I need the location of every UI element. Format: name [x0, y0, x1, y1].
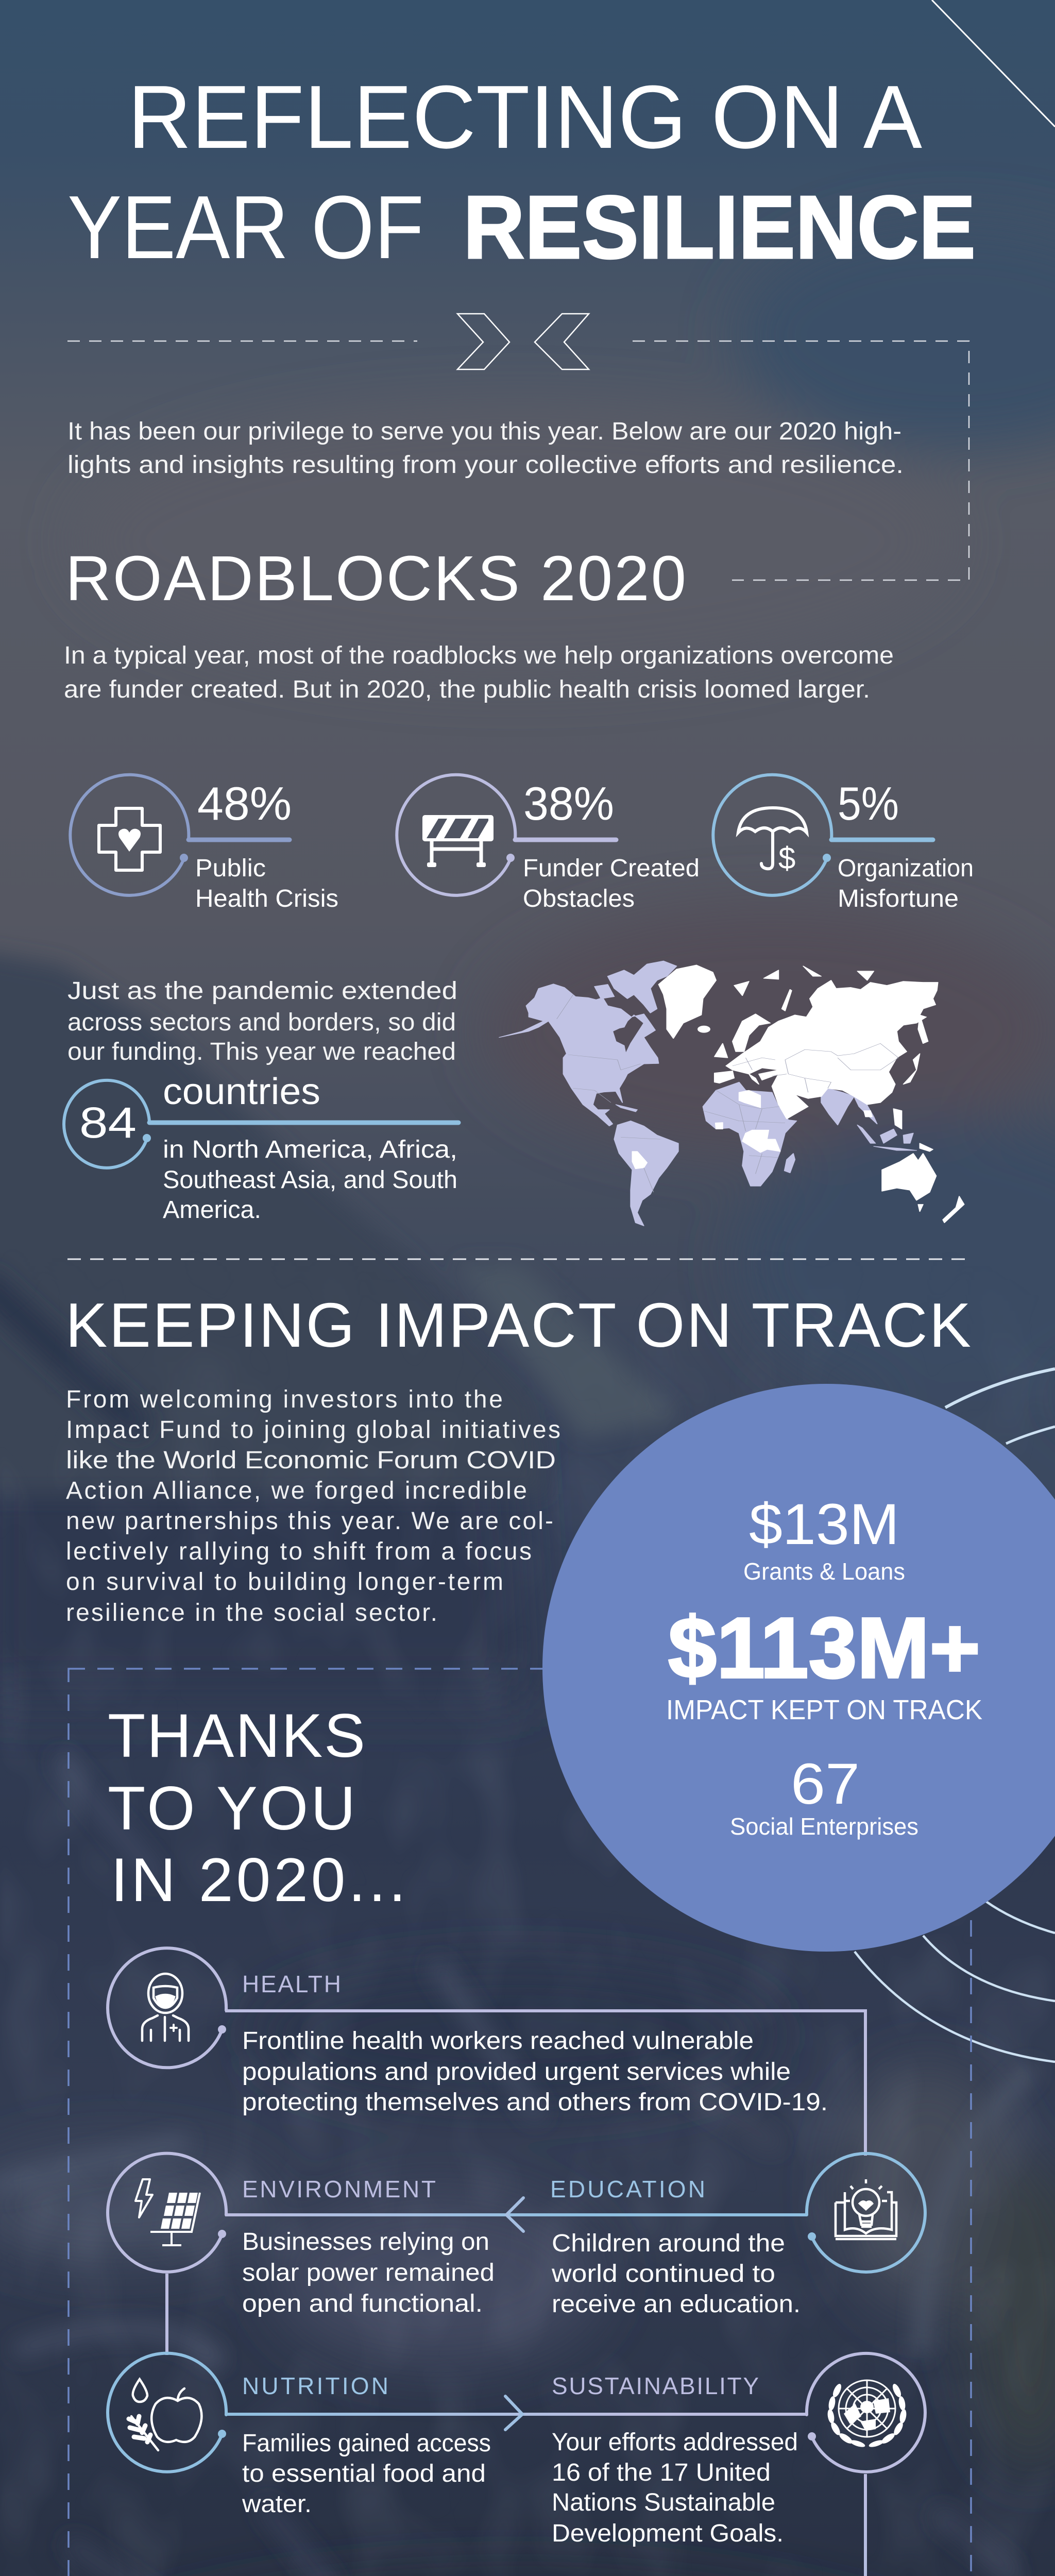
item: health: protecting themselves and others from COVID-19.	[242, 2089, 828, 2116]
stat: 38% funder created obstacles	[397, 775, 700, 912]
impact text: From welcoming investors into the	[66, 1386, 503, 1413]
arrow: nutrition to sustainability	[505, 2396, 522, 2430]
icon: masked health worker	[142, 1974, 189, 2041]
world map	[499, 961, 964, 1226]
item: environment: Businesses relying on	[242, 2228, 489, 2256]
item: health: populations and provided urgent services while	[242, 2058, 791, 2086]
icon: umbrella with dollar: $	[778, 841, 795, 875]
item: nutrition: NUTRITION	[242, 2372, 388, 2399]
ring and rule	[397, 775, 616, 895]
icon: book and lightbulb	[836, 2179, 896, 2239]
ring	[108, 2154, 226, 2272]
ring	[807, 2154, 925, 2272]
roadblocks intro text: In a typical year, most of the roadblocks we help organizations overcome	[64, 642, 894, 669]
title: REFLECTING ON A	[128, 66, 922, 167]
item: sustainability: Nations Sustainable	[552, 2489, 775, 2516]
stat: 84 countries: in North America, Africa,	[163, 1136, 457, 1163]
item: health	[108, 1948, 828, 2116]
ring	[807, 2353, 925, 2472]
roadblocks intro text	[64, 642, 894, 703]
heading: thanks to you in 2020: TO YOU	[108, 1774, 355, 1843]
title: RESILIENCE	[463, 177, 976, 277]
icon: united nations emblem	[827, 2380, 907, 2448]
funding reach text: across sectors and borders, so did	[67, 1009, 456, 1036]
item: nutrition: to essential food and	[242, 2460, 486, 2487]
title	[67, 66, 976, 277]
stat: 84 countries: America.	[163, 1196, 261, 1224]
stat: 48% public health crisis	[70, 775, 338, 912]
chevron logo	[457, 314, 589, 369]
item: sustainability: SUSTAINABILITY	[552, 2372, 759, 2399]
dashed divider	[67, 1258, 971, 1260]
stat: 38% funder created obstacles: Obstacles	[523, 885, 635, 912]
item: nutrition: water.	[242, 2490, 312, 2518]
other regions: white	[632, 965, 964, 1223]
stat: 84 countries	[64, 1071, 458, 1224]
decorative corner line	[932, 0, 1055, 127]
impact text	[66, 1386, 560, 1626]
stat: 48% public health crisis: 48%	[197, 778, 292, 830]
item: education: EDUCATION	[550, 2176, 705, 2202]
impact circle: $13M	[749, 1492, 899, 1556]
heading: thanks to you in 2020	[108, 1701, 406, 1914]
item: health: HEALTH	[242, 1971, 341, 1997]
dashed thanks frame	[69, 1669, 971, 2576]
ring and rule	[70, 775, 290, 895]
impact circle: Grants & Loans	[743, 1558, 905, 1585]
ring	[108, 1948, 226, 2067]
impact circle: Social Enterprises	[730, 1813, 918, 1840]
heading: keeping impact on track: KEEPING IMPACT ON TRACK	[65, 1290, 971, 1360]
item: sustainability: 16 of the 17 United	[552, 2459, 771, 2486]
stat: 38% funder created obstacles: 38%	[523, 778, 614, 830]
stat: 84 countries: countries	[163, 1071, 320, 1112]
intro text: lights and insights resulting from your collective efforts and resilience.	[67, 451, 904, 479]
item: sustainability: Development Goals.	[552, 2520, 784, 2547]
stat: 84 countries: 84	[79, 1098, 137, 1147]
flow connectors	[167, 2011, 865, 2576]
item: environment: solar power remained	[242, 2259, 495, 2286]
item: nutrition	[108, 2353, 491, 2518]
title: YEAR OF	[67, 177, 424, 277]
funding reach text	[67, 977, 457, 1065]
icon: apple, drop and wheat	[129, 2379, 201, 2450]
impact circle	[542, 1384, 1055, 1952]
impact circle: $113M+	[668, 1600, 980, 1696]
dashed intro frame	[67, 341, 969, 580]
ring	[108, 2353, 226, 2472]
item: environment: open and functional.	[242, 2290, 483, 2317]
stat: 5% organization misfortune	[713, 775, 974, 912]
item: education: Children around the	[552, 2230, 785, 2257]
impact text: on survival to building longer-term	[66, 1568, 503, 1596]
heading: roadblocks 2020: ROADBLOCKS 2020	[65, 544, 686, 614]
item: nutrition: Families gained access	[242, 2430, 491, 2457]
stat: 84 countries: Southeast Asia, and South	[163, 1166, 457, 1194]
funding reach text: our funding. This year we reached	[67, 1038, 456, 1065]
stat: 48% public health crisis: Public	[195, 855, 266, 882]
heading: thanks to you in 2020: IN 2020...	[111, 1845, 406, 1914]
item: education: receive an education.	[552, 2291, 801, 2318]
funding reach text: Just as the pandemic extended	[67, 977, 457, 1005]
icon: solar panel and bolt	[135, 2179, 200, 2245]
item: education: world continued to	[551, 2260, 775, 2287]
impact circle: IMPACT KEPT ON TRACK	[666, 1694, 982, 1725]
icon: medical cross with heart	[99, 808, 160, 870]
item: sustainability: Your efforts addressed	[552, 2429, 798, 2456]
item: environment: ENVIRONMENT	[242, 2176, 436, 2202]
intro text	[67, 418, 904, 479]
item: environment	[108, 2154, 495, 2317]
impact text: Action Alliance, we forged incredible	[66, 1477, 527, 1504]
photo grain	[6, 1760, 1015, 2576]
impact text: resilience in the social sector.	[66, 1599, 437, 1626]
icon: road barrier	[422, 815, 494, 867]
stat: 5% organization misfortune: Organization	[838, 855, 974, 882]
funded regions: lavender	[499, 961, 916, 1226]
impact text: new partnerships this year. We are col-	[66, 1507, 553, 1535]
item: sustainability	[552, 2353, 925, 2547]
stat: 48% public health crisis: Health Crisis	[195, 885, 338, 912]
stat: 5% organization misfortune: 5%	[838, 778, 899, 830]
arcs behind impact circle	[855, 1369, 1055, 2062]
item: education	[550, 2154, 925, 2318]
impact circle: 67	[791, 1752, 860, 1816]
icon: umbrella with dollar	[738, 808, 807, 875]
arrow: education to environment	[506, 2198, 523, 2231]
ring and rule	[713, 775, 933, 895]
heading: thanks to you in 2020: THANKS	[108, 1701, 365, 1770]
ring and rule	[64, 1080, 458, 1168]
stat: 38% funder created obstacles: Funder Created	[523, 855, 700, 882]
impact text: Impact Fund to joining global initiatives	[66, 1416, 560, 1444]
stat: 5% organization misfortune: Misfortune	[838, 885, 959, 912]
country borders	[557, 994, 898, 1192]
item: health: Frontline health workers reached vulnerable	[242, 2027, 754, 2055]
intro text: It has been our privilege to serve you this year. Below are our 2020 high-	[67, 418, 901, 445]
impact text: lectively rallying to shift from a focus	[66, 1538, 532, 1565]
impact text: like the World Economic Forum COVID	[66, 1447, 556, 1474]
roadblocks intro text: are funder created. But in 2020, the public health crisis loomed larger.	[64, 676, 870, 703]
